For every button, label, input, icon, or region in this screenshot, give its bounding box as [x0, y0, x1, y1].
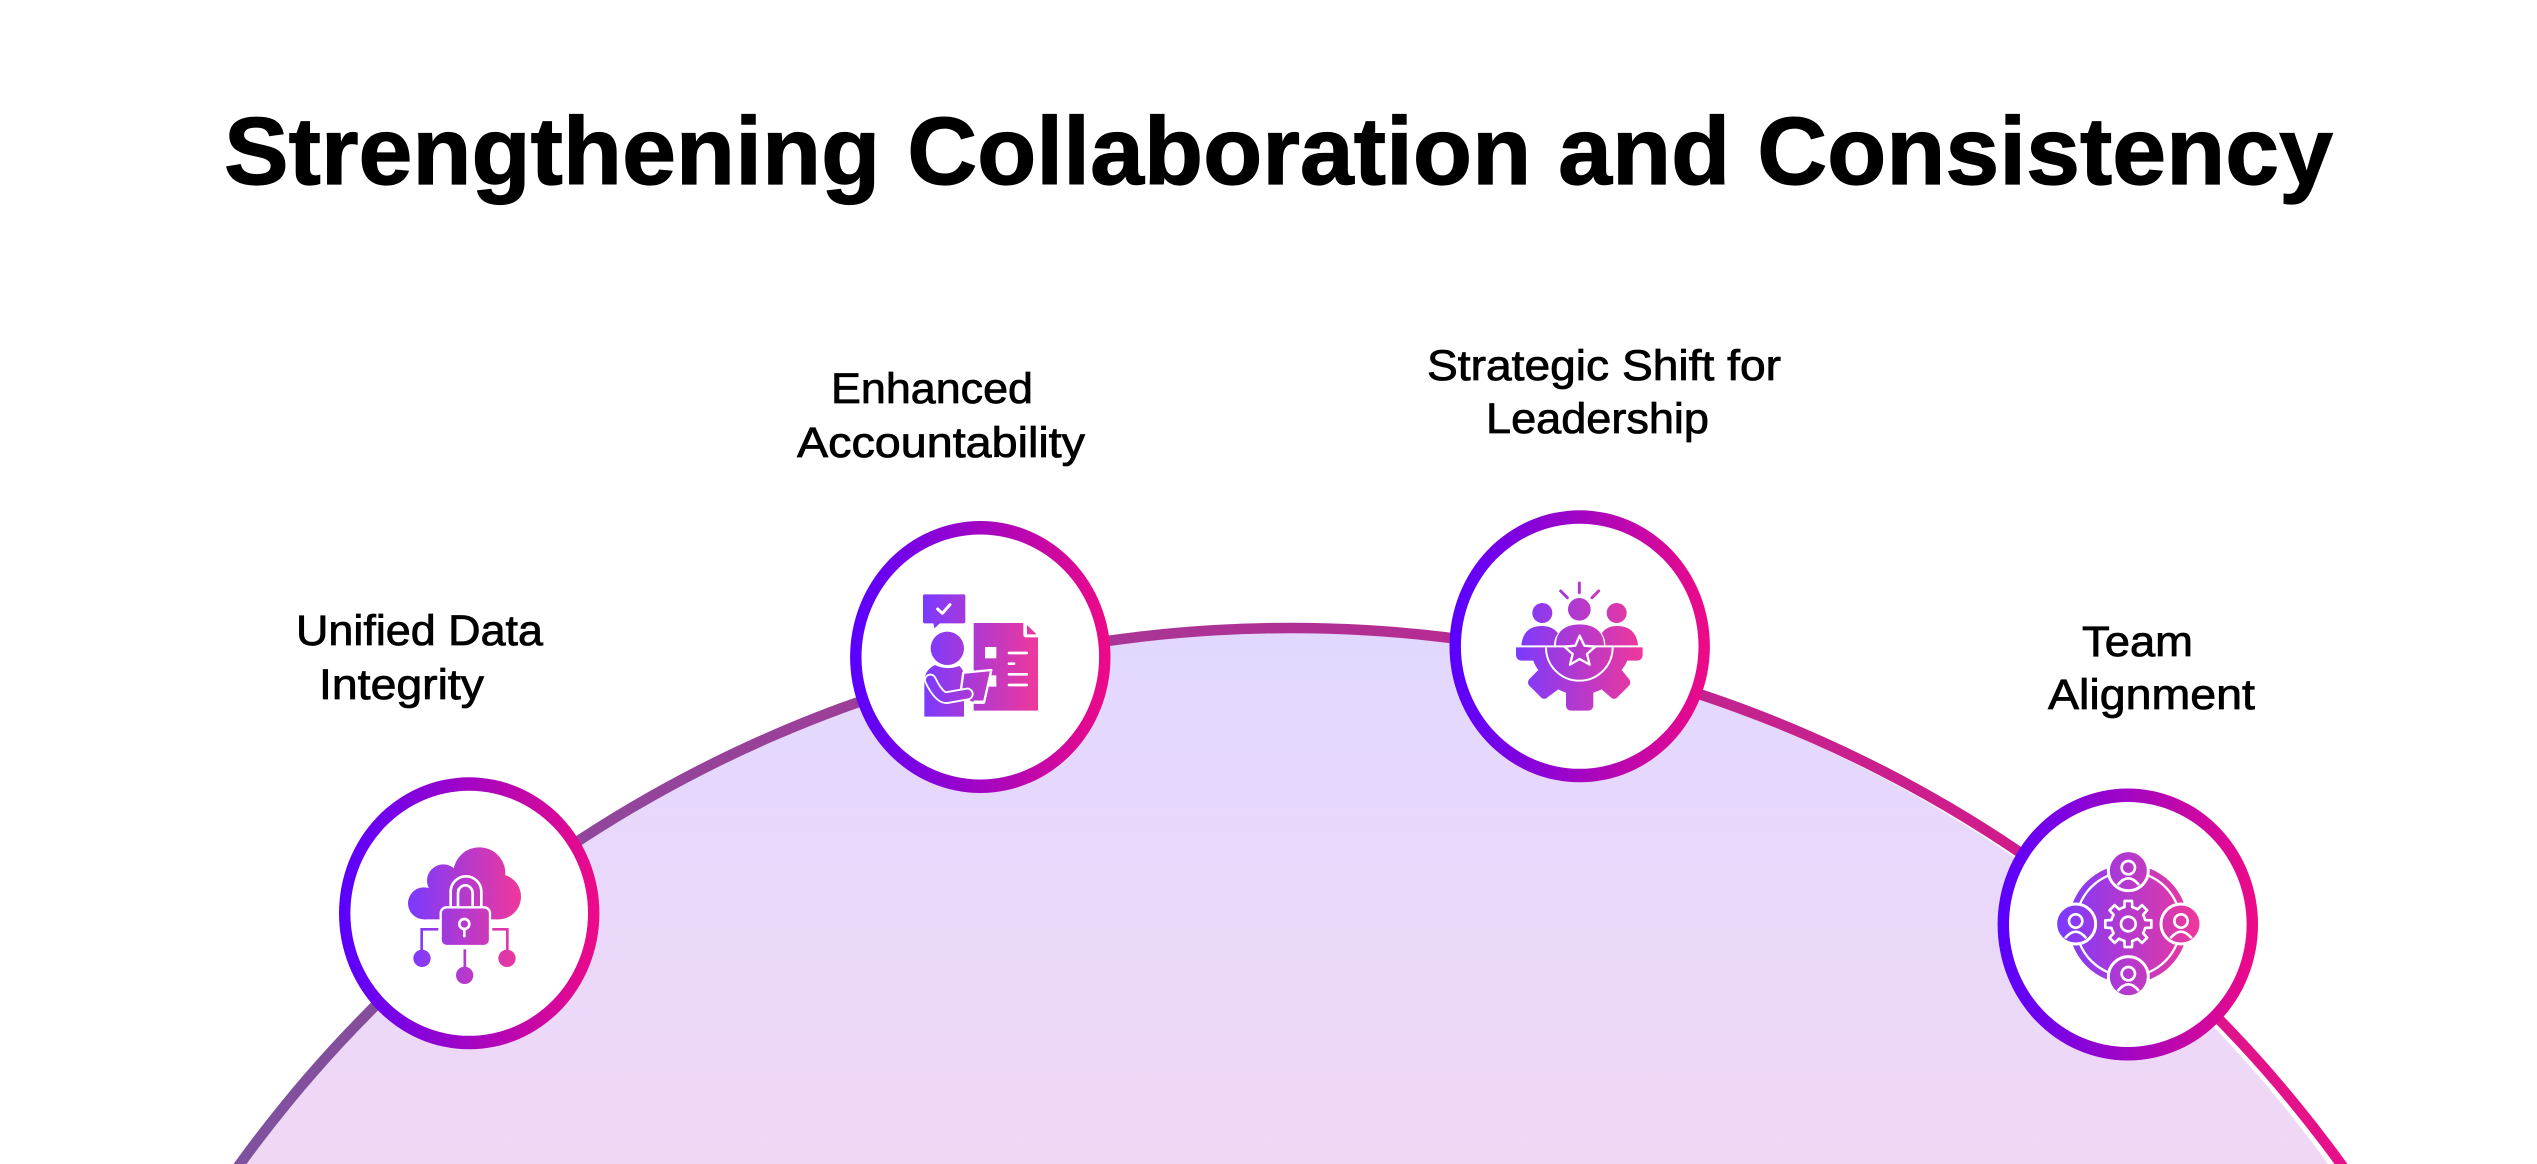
- icon: cloud lock with network: [408, 847, 521, 984]
- ring: node 4: [1998, 788, 2258, 1060]
- label: Enhanced Accountability: Enhanced: [831, 365, 1033, 413]
- label: Team Alignment: Alignment: [2048, 671, 2255, 719]
- ring: node 2: [850, 521, 1110, 793]
- label: Team Alignment: [2048, 618, 2255, 719]
- label: Team Alignment: Team: [2082, 618, 2193, 666]
- label: Enhanced Accountability: [797, 365, 1086, 467]
- ring: node 3: [1450, 510, 1710, 782]
- large semicircle background: [234, 623, 2348, 1164]
- label: Unified Data Integrity: Integrity: [319, 661, 485, 709]
- label: Unified Data Integrity: [296, 607, 543, 709]
- label: Strategic Shift for Leadership: Leadership: [1486, 395, 1709, 443]
- label: Strategic Shift for Leadership: [1427, 342, 1781, 443]
- label: Unified Data Integrity: Unified Data: [296, 607, 543, 655]
- ring: node 1: [339, 777, 599, 1049]
- title: Strengthening Collaboration and Consistency: [224, 98, 2333, 205]
- label: Strategic Shift for Leadership: Strategic Shift for: [1427, 342, 1781, 390]
- label: Enhanced Accountability: Accountability: [797, 419, 1086, 467]
- icon: people around gear: [2056, 851, 2201, 997]
- icon: team with gear and star: [1516, 583, 1643, 711]
- icon: person with document: [923, 594, 1038, 717]
